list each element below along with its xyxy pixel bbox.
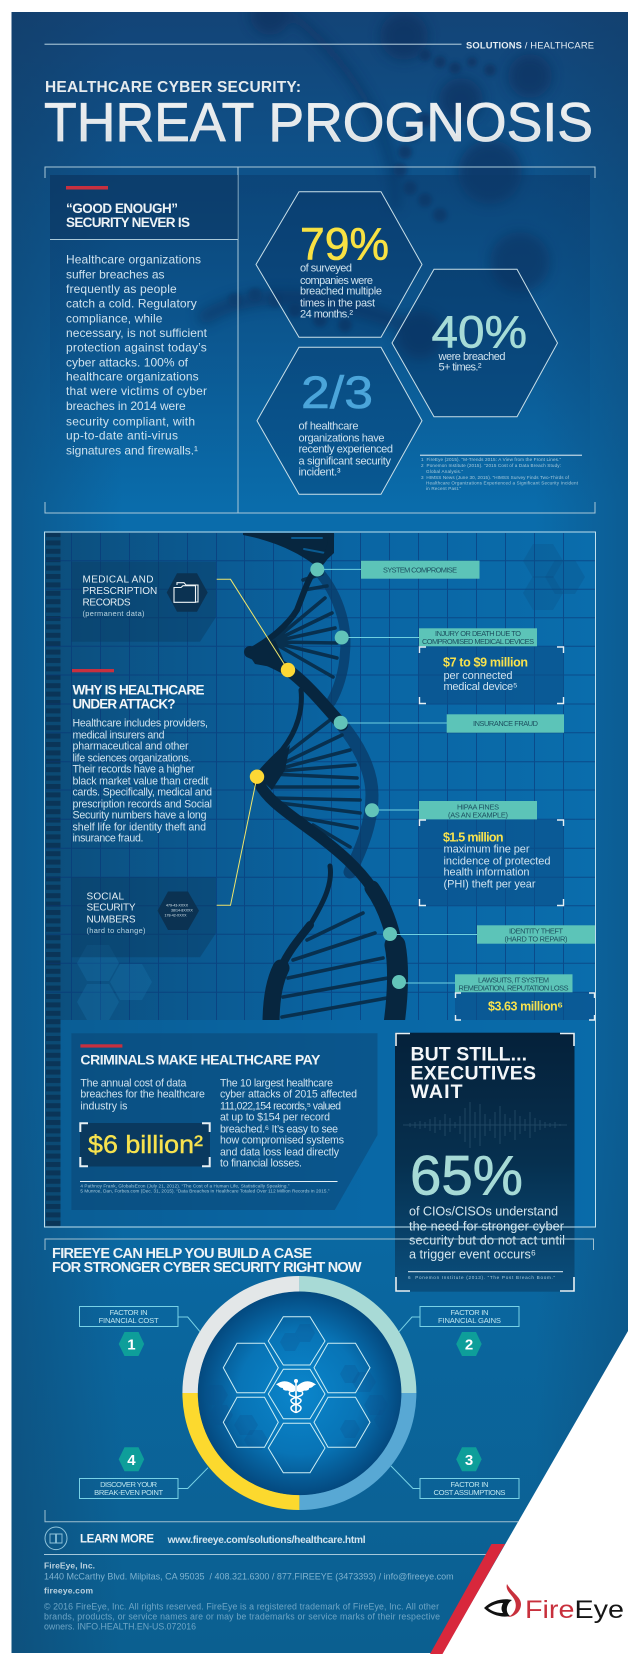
panel: medical records: PRESCRIPTION [82,586,157,597]
panel: executives wait: the need for stronger cyber [409,1220,565,1234]
panel: medical records: (permanent data) [82,609,144,618]
icon: folder [174,583,198,602]
panel: social security numbers: 178-42-XXXX [164,914,187,918]
panel: executives wait: of CIOs/CISOs understand [409,1204,558,1218]
panel: why is healthcare under attack: black market value than credit [72,776,209,788]
callout: lawsuits: LAWSUITS, IT SYSTEM [478,976,549,984]
blurred DNA background photo [200,0,552,359]
learn more bar [44,1527,487,1555]
red accent bar [66,186,108,190]
callout: six billion: $6 billion² [88,1131,203,1159]
hexagon: two thirds: 2/3 [301,367,373,418]
title: THREAT PROGNOSIS [44,91,593,153]
panel: executives wait: WAIT [410,1081,463,1103]
text: largest attacks: 111,022,154 records,⁵ valued [220,1100,341,1112]
panel: social security numbers: 38/14-8XXXX [171,908,193,912]
text: largest attacks: to financial losses. [220,1158,302,1170]
heading: good enough: SECURITY NEVER IS [66,215,190,230]
hexagon: 79 percent: times in the past [300,298,375,310]
step 2: financial gains [399,1306,519,1356]
text: annual cost: The annual cost of data [80,1078,186,1090]
ring diagram [182,1276,416,1510]
panel: good enough security [0,0,595,513]
text: largest attacks: at up to $154 per record [220,1112,330,1124]
footnotes: criminals: 5 Munroe, Dan, Forbes.com (Dec. 31, 2015). “Data Breaches in Healthcare Totaled Over 112 Million Records in 2015.” [80,1188,330,1194]
body text: healthcare organizations: that were victims of cyber [66,384,207,398]
panel: why is healthcare under attack: medical insurers and [72,730,165,742]
step 3: cost assumptions: FACTOR IN [450,1480,488,1489]
heading: fireeye can help: FIREEYE CAN HELP YOU BUILD A CASE [52,1246,312,1262]
hexagon outlines [223,1317,370,1473]
panel: social security numbers: NUMBERS [86,914,136,926]
step 3: cost assumptions: 3 [465,1452,473,1469]
hexagon: 40 percent: 40% [432,306,527,358]
panel: executives wait: BUT STILL... [410,1044,527,1066]
hexagon: two thirds: recently experienced [298,444,393,456]
body text: healthcare organizations: healthcare organizations [66,370,199,384]
body text: healthcare organizations: catch a cold. Regulatory [66,296,197,310]
panel: why is healthcare under attack: life sciences organizations. [72,752,192,764]
callout: lawsuits: $3.63 million⁶ [488,1000,563,1014]
text: largest attacks: and data loss lead directly [220,1146,340,1158]
icon: caduceus [276,1379,316,1413]
step 3: cost assumptions [391,1447,519,1498]
decorative hexagons: left [77,945,152,1020]
callout: medical devices: COMPROMISED MEDICAL DEVICES [422,637,534,646]
hexagon: 40 percent: were breached [438,351,506,363]
text: largest attacks: how compromised systems [220,1134,344,1146]
step 4: break-even point: 4 [127,1452,136,1469]
logo: FireEye: Fire Eye [525,1596,624,1624]
hexagon: 79 percent [256,192,422,337]
panel: why is healthcare under attack: insurance fraud. [72,832,144,844]
heading: good enough: “GOOD ENOUGH” [66,201,178,216]
decorative hexagons: right [523,544,585,610]
body text: healthcare organizations: Healthcare organizations [66,252,201,266]
connector: medical records to helix [217,579,295,677]
step 1: financial cost: FACTOR IN [110,1308,148,1317]
body text: healthcare organizations: compliance, while [66,312,163,326]
title: HEALTHCARE CYBER SECURITY: [45,79,301,96]
footnotes: top section: 3 HIMSS News (June 30, 2015). “HIMSS Survey Finds Two-Thirds of [421,475,570,480]
top dark mass [243,533,334,564]
callout: HIPAA fines [365,801,564,906]
panel: executives wait [395,1033,574,1292]
header tag line: SOLUTIONS / HEALTHCARE [466,40,594,50]
callout: identity theft [383,925,595,944]
heading: fireeye can help [52,1246,362,1276]
translucent back strands [319,572,372,872]
rungs [263,574,388,1017]
text: largest attacks: The 10 largest healthcare [220,1078,333,1090]
text: annual cost: breaches for the healthcare [80,1088,205,1100]
step 4: break-even point [80,1447,208,1498]
panel: executives wait: 6 Ponemon Institute (2013). “The Post Breach Boom.” [408,1275,555,1280]
panel: criminals make healthcare pay: CRIMINALS MAKE HEALTHCARE PAY [80,1052,321,1068]
body text: healthcare organizations: breaches in 2014 were [66,399,186,413]
panel: medical records [71,562,216,642]
callout: lawsuits: REMEDIATION, REPUTATION LOSS [458,984,569,992]
text: largest attacks: cyber attacks of 2015 affected [220,1088,357,1100]
callout: medical devices: $7 to $9 million [443,656,528,670]
footer text: owners. INFO.HEALTH.EN-US.072016 [44,1622,196,1632]
body text: healthcare organizations: frequently as people [66,282,177,296]
step 4: break-even point: BREAK-EVEN POINT [94,1488,163,1497]
footer text: brands, products, or service names are or may be trademarks or service marks of their respective [44,1612,440,1622]
logo: FireEye [484,1584,624,1624]
panel: why is healthcare under attack: WHY IS HEALTHCARE [72,682,204,698]
hexagon: 79 percent: companies were [300,275,373,287]
hexagon: 79 percent: breached multiple [300,286,382,298]
body text: healthcare organizations: suffer breaches as [66,268,164,282]
hexagon: two thirds [257,347,422,494]
footer text: FireEye, Inc. [44,1560,95,1570]
callout: identity theft: IDENTITY THEFT [509,926,563,936]
panel: executives wait: 65% [410,1144,523,1206]
panel: social security numbers: SECURITY [86,902,136,914]
step 4: break-even point: DISCOVER YOUR [100,1480,158,1489]
callout: lawsuits [392,974,595,1020]
panel: medical records: RECORDS [82,598,131,608]
text: largest attacks: breached.⁶ It’s easy to see [220,1124,338,1136]
hexagon: two thirds: a significant security [298,456,392,468]
step 2: financial gains: 2 [465,1336,473,1354]
panel: medical records: MEDICAL AND [82,574,154,586]
panel: social security numbers [71,877,216,957]
step 2: financial gains: FACTOR IN [450,1308,488,1317]
panel: criminals make healthcare pay [71,1033,378,1210]
callout: HIPAA fines: (PHI) theft per year [444,878,536,890]
panel: executives wait: EXECUTIVES [410,1062,536,1084]
footer text [44,1560,454,1632]
waveform [403,1102,567,1148]
callout: medical devices: medical device⁵ [444,681,518,693]
panel: why is healthcare under attack: cards. Specifically, medical and [72,786,212,798]
panel: why is healthcare under attack: prescription records and Social [72,798,212,810]
body text: healthcare organizations: cyber attacks. 100% of [66,356,189,370]
learn more bar: LEARN MORE [80,1534,154,1546]
footer text: 1440 McCarthy Blvd. Milpitas, CA 95035 / 408.321.6300 / 877.FIREEYE (3473393) / info@fireeye.com [44,1572,454,1582]
heading: fireeye can help: FOR STRONGER CYBER SECURITY RIGHT NOW [52,1260,362,1276]
step 1: financial cost: FINANCIAL COST [99,1316,159,1325]
panel: social security numbers: (hard to change) [86,926,146,935]
hexagon: two thirds: incident.³ [298,466,341,478]
step 1: financial cost: 1 [127,1336,136,1354]
footnotes: top section: Healthcare Organizations Experienced a Significant Security Incident [426,480,579,486]
callout: HIPAA fines: health information [444,866,530,878]
step 2: financial gains: FINANCIAL GAINS [438,1316,501,1325]
panel: social security numbers: SOCIAL [86,892,124,902]
hexagon: two thirds: of healthcare [298,420,358,432]
inner shaded hexagons [204,1324,398,1450]
panel: why is healthcare under attack: Healthcare includes providers, [72,718,208,730]
body text: healthcare organizations: up-to-date anti-virus [66,428,178,442]
callout: HIPAA fines: HIPAA FINES [457,802,499,812]
step 3: cost assumptions: COST ASSUMPTIONS [434,1488,506,1497]
hexagon: 40 percent [392,269,558,417]
callout: system compromise: SYSTEM COMPROMISE [383,566,457,574]
footer text: © 2016 FireEye, Inc. All rights reserved. FireEye is a registered trademark of FireEye, Inc. All other [44,1602,439,1612]
panel: executives wait: a trigger event occurs⁶ [409,1248,536,1262]
hexagon: 79 percent: of surveyed [300,262,352,274]
panel: why is healthcare under attack [0,0,215,844]
body text: healthcare organizations: security compliant, with [66,414,195,428]
panel: DNA section background [45,532,595,1227]
callout: HIPAA fines: (AS AN EXAMPLE) [448,810,508,820]
footnotes: top section: 2 Ponemon Institute (2015). “2015 Cost of a Data Breach Study: [421,463,561,468]
learn more bar: www.fireeye.com/solutions/healthcare.html [167,1535,366,1546]
section frame lines [44,532,596,1522]
callout: HIPAA fines: incidence of protected [444,856,550,868]
body text: healthcare organizations: protection against today’s [66,340,207,354]
hexagon: 79 percent: 24 months.² [300,308,353,320]
callout: insurance fraud: INSURANCE FRAUD [473,719,538,728]
DNA helix [243,532,398,1024]
footnotes: top section [420,455,582,491]
callout: system compromise [310,561,480,579]
callout: insurance fraud [334,714,564,733]
panel: why is healthcare under attack: Their records have a higher [72,764,195,776]
hexagon: 79 percent: 79% [300,218,389,270]
callout: HIPAA fines: maximum fine per [444,844,530,856]
connector: social security to helix [217,770,264,905]
panel: why is healthcare under attack: pharmaceutical and other [72,740,189,752]
dark strands [250,533,398,1024]
panel: why is healthcare under attack: UNDER ATTACK? [72,696,176,712]
hexagon: 40 percent: 5+ times.² [438,362,482,374]
text: annual cost: industry is [80,1100,127,1112]
footnotes: top section: 1 FireEye (2015). “M-Trends 2015: A View from the Front Lines.” [421,457,561,462]
callout: medical devices: INJURY OR DEATH DUE TO [435,629,521,638]
footer text: fireeye.com [44,1586,93,1596]
hexagon: two thirds: organizations have [298,432,384,444]
body text: healthcare organizations: necessary, is not sufficient [66,326,208,340]
callout: medical devices [335,628,564,704]
callout: medical devices: per connected [444,670,512,682]
panel: why is healthcare under attack: Security numbers have a long [72,810,207,822]
callout: identity theft: (HARD TO REPAIR) [504,934,568,944]
panel: why is healthcare under attack: shelf life for identity theft and [72,822,206,834]
callout: six billion [80,1123,210,1166]
footnotes: top section: Global Analysis.” [426,469,463,474]
footnotes: criminals: 4 Pathnoy Frank, GlobalsEcon (July 21, 2012). “The Cost of a Human Life, Statistically Speaking.” [80,1184,290,1188]
step 1: financial cost [80,1306,200,1356]
panel: social security numbers: 479-43-XXXX [166,904,189,908]
body text: healthcare organizations: signatures and firewalls.¹ [66,444,198,458]
panel: executives wait: security but do not act until [409,1234,565,1248]
footnotes: top section: in Recent Past.” [426,486,461,491]
callout: HIPAA fines: $1.5 million [443,830,504,844]
white corner with red band [430,1331,638,1654]
